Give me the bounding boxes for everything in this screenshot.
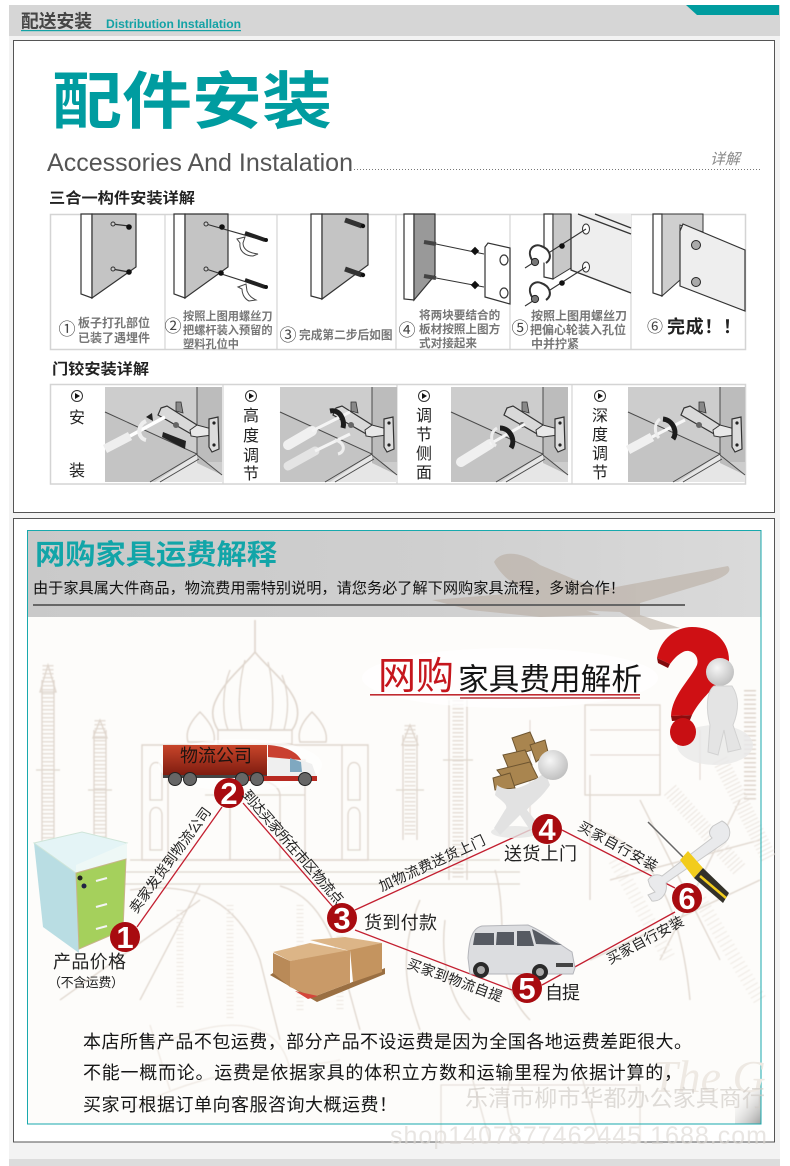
route labels: 加物流费送货上门 <box>376 832 488 894</box>
step 2: 塑料孔位中 <box>183 337 239 351</box>
step 3: 完成第二步后如图 <box>299 328 393 342</box>
step 5: 按照上图用螺丝刀 <box>531 308 627 323</box>
icon: white van <box>468 925 575 980</box>
step 1: 板子打孔部位 <box>78 315 150 330</box>
hinge step: side adjust: 节 <box>416 426 432 444</box>
step node 3 <box>327 901 357 936</box>
hinge step: depth adjust: 调 <box>592 445 608 463</box>
shipping note <box>83 1032 692 1115</box>
node labels: （不含运费） <box>48 975 124 990</box>
step 6: 完成！！ <box>667 316 741 337</box>
step node 1 <box>110 920 140 955</box>
icon: cabinet <box>34 832 127 953</box>
step 5 <box>512 214 631 351</box>
inner border <box>28 530 761 1124</box>
hinge step: height adjust: 高 <box>243 407 259 425</box>
node labels: 送货上门 <box>504 844 577 864</box>
step 2: 按照上图用螺丝刀 <box>183 309 273 323</box>
plane sketch <box>432 554 729 630</box>
decorative script: The G <box>652 1051 766 1102</box>
header English title: Distribution Installation <box>106 19 241 31</box>
watermark: shop1407877462445.1688.com <box>390 1122 767 1150</box>
shipping note: 本店所售产品不包运费，部分产品不设运费是因为全国各地运费差距很大。 <box>83 1032 692 1052</box>
node labels <box>48 844 580 1003</box>
heading: online furniture cost analysis: 家具费用解析 <box>458 663 642 697</box>
step node 5: 5 <box>518 971 536 1006</box>
header underline <box>21 30 241 31</box>
shipping note: 不能一概而论。运费是依据家具的体积立方数和运输里程为依据计算的， <box>83 1063 682 1083</box>
hinge step: depth adjust: 节 <box>592 464 608 482</box>
step 2 <box>164 214 273 351</box>
hinge step: depth adjust <box>592 387 745 482</box>
hinge step: install: 装 <box>69 462 85 480</box>
hinge step: depth adjust: 度 <box>592 426 608 444</box>
English subtitle: Accessories And Instalation <box>47 149 353 177</box>
route labels: 买家自行安装 <box>576 818 660 874</box>
inner bottom-right shadow <box>735 1090 761 1124</box>
step 5: ⑤ <box>512 319 528 338</box>
watermark: 乐清市柳市华都办公家具商行 <box>465 1085 765 1111</box>
step 4: ④ <box>398 321 416 340</box>
hinge step: side adjust: 调 <box>416 407 432 425</box>
header corner tab <box>686 5 779 15</box>
step 2: ② <box>164 317 182 336</box>
heading: three-in-one connector: 三合一构件安装详解 <box>49 189 195 207</box>
heading: online furniture cost analysis <box>362 648 658 708</box>
detail label: 详解 <box>710 151 742 168</box>
icon: cardboard boxes on pallet <box>270 937 385 1002</box>
step 2: 把螺杆装入预留的 <box>183 323 273 337</box>
hinge step: height adjust: 度 <box>243 427 259 445</box>
hinge step: height adjust: 节 <box>243 465 259 483</box>
hinge step: side adjust: 面 <box>416 465 432 482</box>
page bottom strip <box>9 1159 780 1166</box>
connector steps table <box>50 214 746 351</box>
node labels: 货到付款 <box>364 913 437 933</box>
section header bar <box>9 5 780 36</box>
background sketch of palace <box>36 620 770 1142</box>
icon: question mark with figure <box>657 627 753 765</box>
step node 6: 6 <box>678 881 696 916</box>
inner illustrated area <box>27 531 761 1124</box>
watermark <box>390 1085 767 1150</box>
route lines <box>137 803 675 990</box>
hinge step: height adjust: 调 <box>243 447 259 465</box>
hinge step: depth adjust: 深 <box>592 407 608 425</box>
step 1: 已装了遇埋件 <box>78 330 150 345</box>
icon: wrench and screwdriver <box>648 821 730 903</box>
route labels: 卖家发货到物流公司 <box>126 804 214 916</box>
step node 2: 2 <box>220 776 238 811</box>
hinge step: install: 安 <box>69 409 85 427</box>
dotted rule <box>354 168 760 170</box>
truck label: 物流公司 <box>180 746 252 766</box>
panel: shipping explanation <box>14 518 774 1142</box>
step node 1: 1 <box>116 920 134 955</box>
step 6 <box>647 214 745 337</box>
step 1: ① <box>58 320 76 339</box>
route labels: 买家到物流自提 <box>405 955 505 1005</box>
band title: 网购家具运费解释 <box>35 539 277 570</box>
node labels: 产品价格 <box>53 952 126 972</box>
route labels: 到达买家所在市区物流点 <box>239 787 347 907</box>
panel: accessories installation <box>14 40 774 512</box>
step 3: ③ <box>280 326 296 345</box>
hinge step: side adjust: 侧 <box>416 445 432 463</box>
route labels: 买家自行安装 <box>604 913 686 967</box>
step 1 <box>58 214 150 345</box>
icon: logistics truck <box>158 739 322 791</box>
step 3 <box>280 214 393 345</box>
main title: 配件安装 <box>52 68 332 137</box>
hinge step: install <box>69 387 222 482</box>
band description: 由于家具属大件商品，物流费用需特别说明，请您务必了解下网购家具流程，多谢合作！ <box>33 580 625 597</box>
step 6: ⑥ <box>647 318 663 336</box>
hinge step: height adjust <box>243 387 397 483</box>
step node 4 <box>532 812 562 847</box>
icon: person carrying boxes <box>491 732 568 838</box>
hinge step: side adjust <box>416 387 568 482</box>
step node 5 <box>512 971 542 1006</box>
title band <box>27 531 761 630</box>
step node 3: 3 <box>333 901 351 936</box>
node labels: 自提 <box>545 983 580 1003</box>
step 4: 板材按照上图方 <box>419 322 500 336</box>
heading: door hinge: 门铰安装详解 <box>52 360 149 378</box>
header Chinese title: 配送安装 <box>21 12 92 32</box>
heading: online furniture cost analysis: 网购 <box>378 656 454 698</box>
route labels <box>126 787 686 1005</box>
shipping note: 买家可根据订单向客服咨询大概运费！ <box>83 1095 397 1115</box>
step 4 <box>398 214 510 350</box>
step 5: 把偏心轮装入孔位 <box>530 322 626 337</box>
step 4: 将两块要结合的 <box>419 308 500 322</box>
step 5: 中并拧紧 <box>531 336 579 351</box>
step node 2 <box>214 776 244 811</box>
band rule <box>33 604 685 606</box>
step node 4: 4 <box>538 812 556 847</box>
step 4: 式对接起来 <box>419 336 477 350</box>
hinge steps table <box>50 384 746 484</box>
step node 6 <box>672 881 702 916</box>
